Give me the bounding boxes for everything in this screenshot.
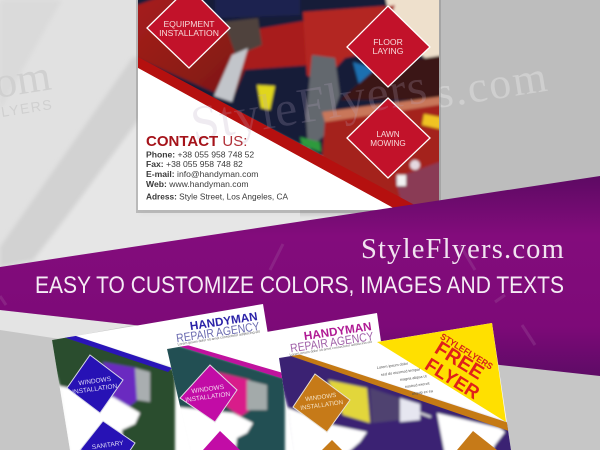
diamond: lower orange right [457,431,497,450]
photo: drill green [45,335,175,450]
text block: body copy: nostrud exercit [405,381,431,389]
main flyer [130,0,445,222]
text block: body copy: aliquip ex ea [412,389,434,396]
diamond: windows magenta: WINDOWS [191,384,225,395]
flyer: orange [272,323,515,450]
red diagonal band [138,57,414,208]
yellow corner badge: FREE [431,337,488,384]
text block: body copy: magna aliqua ut [400,374,428,382]
diamond: lawn mowing: LAWN [376,130,400,139]
contact details: Web: www.handyman.com [146,179,249,189]
diamond: windows blue: INSTALLATION [72,383,118,396]
photo: tool belt [138,0,439,204]
purple banner [0,176,600,376]
subheading: repair agency blue: REPAIR AGENCY [175,319,260,345]
flyer: magenta [160,313,392,450]
contact details: Adress: Style Street, Los Angeles, CA [146,192,288,202]
diamond: windows magenta: INSTALLATION [185,391,231,404]
text block: body copy: Lorem ipsum dolor [377,362,409,370]
watermark: left: LYERS [0,96,54,120]
watermark: right: s.com [432,52,552,118]
heading: handyman magenta: HANDYMAN [303,320,372,343]
yellow corner badge: STYLEFLYERS [438,331,495,372]
yellow corner badge: FLYER [421,355,483,404]
diamond: lower magenta [203,431,240,450]
contact details: Fax: +38 055 958 748 82 [146,159,243,169]
photo: drill teal [160,345,285,450]
diamond: equipment installation: INSTALLATION [159,28,219,38]
contact heading: CONTACT US: [146,133,247,150]
diamond: lower orange left [322,440,342,450]
body line blue: Lorem ipsum dolor sit amet consectetur adipiscing elit [177,330,260,347]
text block: body copy: sed do eiusmod tempor [381,367,421,377]
watermark: over flyer: StyleFlyers [187,57,431,152]
contact details: Phone: +38 055 958 748 52 [146,150,254,160]
diamond: windows blue [67,355,123,413]
diamond: floor laying: LAYING [373,46,404,56]
photo: drill purple [272,354,515,450]
diamond: windows magenta [180,365,237,422]
site name: StyleFlyers.com [361,234,565,265]
yellow corner badge [377,323,506,422]
contact details [146,150,288,202]
white contact area [138,68,397,210]
subheading: repair agency magenta: REPAIR AGENCY [289,329,374,355]
contact details: E-mail: info@handyman.com [146,169,258,179]
heading: handyman blue: HANDYMAN [189,310,258,333]
diamond: equipment installation: EQUIPMENT [163,19,215,29]
flyer: blue [45,304,282,450]
diamond: lawn mowing [347,98,430,178]
body line magenta: Lorem ipsum dolor sit amet consectetur adipiscing elit [289,340,372,357]
diamond: windows orange [293,374,350,432]
diamond: sanitary [80,421,135,450]
diamond: windows orange: INSTALLATION [300,399,344,412]
diamond: windows orange: WINDOWS [305,392,337,403]
diamond: windows blue: WINDOWS [78,376,112,387]
text block: body copy [377,362,434,396]
diamond: floor laying [347,6,430,87]
diamond: floor laying: FLOOR [373,37,403,47]
diamond: equipment installation [147,0,230,68]
diamond: lawn mowing: MOWING [370,139,406,148]
